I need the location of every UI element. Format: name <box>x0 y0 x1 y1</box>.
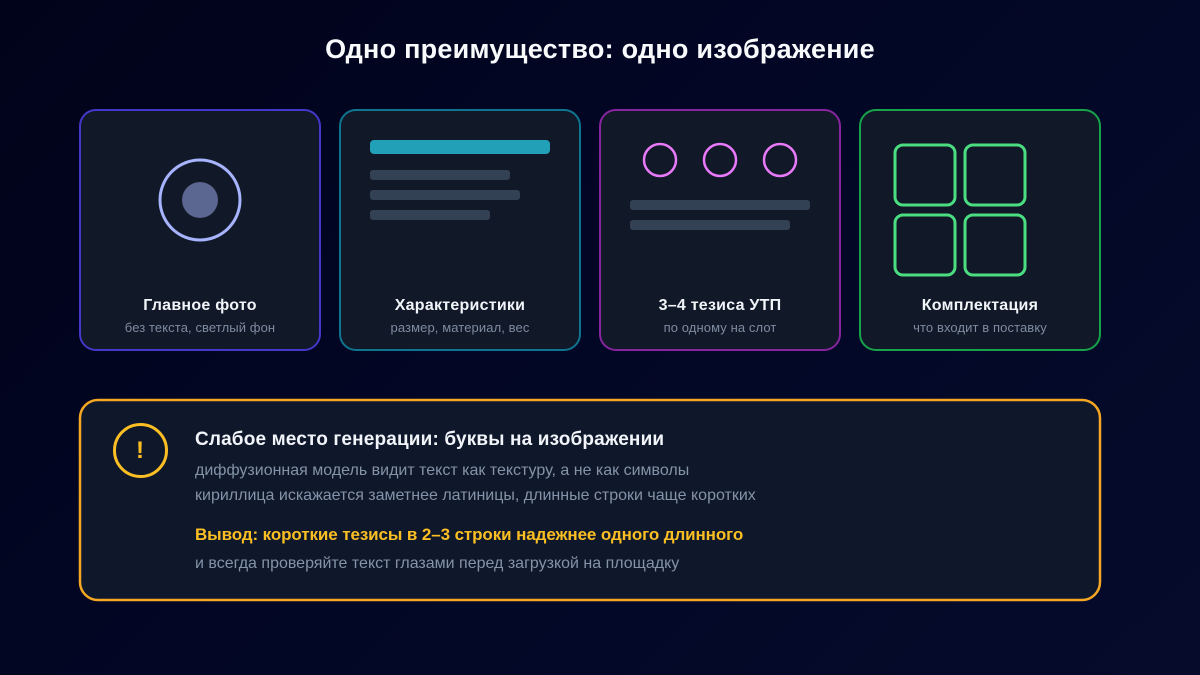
icon: exclamation <box>112 422 168 478</box>
icon: circles and lines <box>630 142 810 230</box>
card caption: main photo: без текста, светлый фон <box>125 320 275 335</box>
card heading: package contents: Комплектация <box>922 297 1038 314</box>
callout conclusion: Вывод: короткие тезисы в 2–3 строки надежнее одного длинного <box>195 525 743 544</box>
title: Одно преимущество: одно изображение <box>325 34 875 64</box>
card caption: specs: размер, материал, вес <box>391 320 529 335</box>
card heading: main photo: Главное фото <box>143 297 257 314</box>
callout description: диффузионная модель видит текст как текстуру, а не как символы <box>195 462 689 479</box>
panel: USP theses <box>599 109 841 351</box>
callout description <box>195 462 756 504</box>
panel: specs <box>339 109 581 351</box>
card heading: USP theses: 3–4 тезиса УТП <box>659 297 781 314</box>
callout description: кириллица искажается заметнее латиницы, длинные строки чаще коротких <box>195 487 756 504</box>
panel: warning callout <box>78 398 1102 602</box>
callout note: и всегда проверяйте текст глазами перед загрузкой на площадку <box>195 555 679 572</box>
icon: four squares <box>894 144 1026 276</box>
icon: lens target <box>158 158 242 242</box>
card heading: specs: Характеристики <box>395 297 525 314</box>
card caption: package contents: что входит в поставку <box>913 320 1047 335</box>
panel: main photo <box>79 109 321 351</box>
icon: exclamation: ! <box>136 436 144 464</box>
callout heading: Слабое место генерации: буквы на изображении <box>195 429 664 450</box>
icon: spec lines <box>370 140 550 220</box>
panel: package contents <box>859 109 1101 351</box>
card caption: USP theses: по одному на слот <box>664 320 776 335</box>
